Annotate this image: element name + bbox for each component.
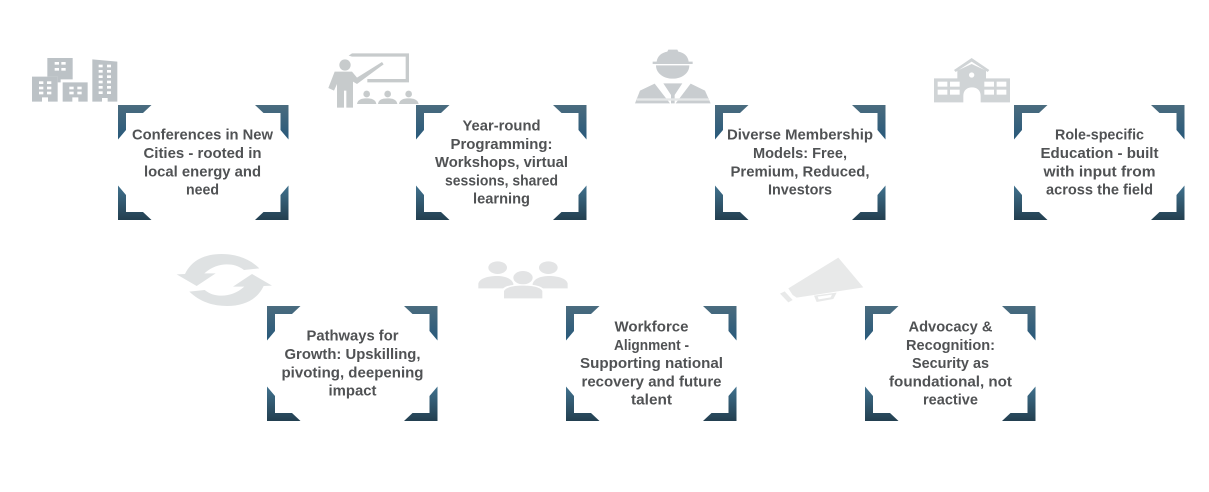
label: Alignment - [614, 338, 689, 354]
corner brackets [865, 306, 1036, 421]
label [727, 128, 873, 198]
corner brackets [715, 105, 886, 220]
label: Year-round [462, 118, 540, 134]
label: Education - built [1040, 146, 1159, 162]
icon: worker in hard hat [635, 50, 711, 103]
label [889, 320, 1012, 408]
label: Workforce [614, 320, 688, 336]
corner brackets [566, 306, 736, 421]
label [435, 118, 568, 208]
label: impact [328, 384, 377, 400]
corner brackets [118, 105, 288, 220]
label: Programming: [450, 137, 552, 153]
label: sessions, shared [445, 174, 558, 190]
label: Models: Free, [753, 146, 847, 162]
label: recovery and future [582, 374, 722, 390]
label: Cities - rooted in [144, 146, 262, 162]
label: Workshops, virtual [435, 155, 568, 171]
label [580, 320, 723, 408]
label: with input from [1042, 164, 1156, 180]
panel: education [1014, 105, 1184, 220]
label: across the field [1046, 182, 1153, 198]
panel: pathways [267, 306, 438, 421]
icon: megaphone [780, 258, 863, 302]
label [132, 128, 274, 198]
panel: workforce [566, 306, 736, 421]
panel: advocacy [865, 306, 1036, 421]
label: Recognition: [906, 338, 995, 354]
label: talent [631, 392, 672, 408]
label: pivoting, deepening [282, 365, 424, 381]
label: reactive [923, 392, 978, 408]
panel: programming [416, 105, 586, 220]
panel: membership [715, 105, 886, 220]
icon: office buildings [32, 58, 117, 102]
corner brackets [267, 306, 438, 421]
label: learning [473, 192, 530, 208]
panel: conferences [118, 105, 288, 220]
icon: school building [934, 58, 1010, 102]
label: Security as [912, 356, 989, 372]
label: need [186, 182, 219, 198]
label: Premium, Reduced, [730, 164, 870, 180]
label: Conferences in New [132, 128, 274, 144]
label [282, 328, 424, 400]
label: Advocacy & [908, 320, 993, 336]
corner brackets [1014, 105, 1184, 220]
label: Investors [768, 182, 832, 198]
label: local energy and [144, 164, 261, 180]
label: Pathways for [306, 328, 399, 344]
label: Diverse Membership [727, 128, 873, 144]
corner brackets [416, 105, 586, 220]
icon: circular arrows [177, 254, 272, 306]
label: Supporting national [580, 356, 723, 372]
label: foundational, not [889, 374, 1012, 390]
icon: presenter at board [328, 53, 419, 108]
icon: group of people [478, 261, 568, 300]
label [1040, 128, 1159, 198]
label: Growth: Upskilling, [284, 347, 420, 363]
label: Role-specific [1055, 128, 1144, 144]
